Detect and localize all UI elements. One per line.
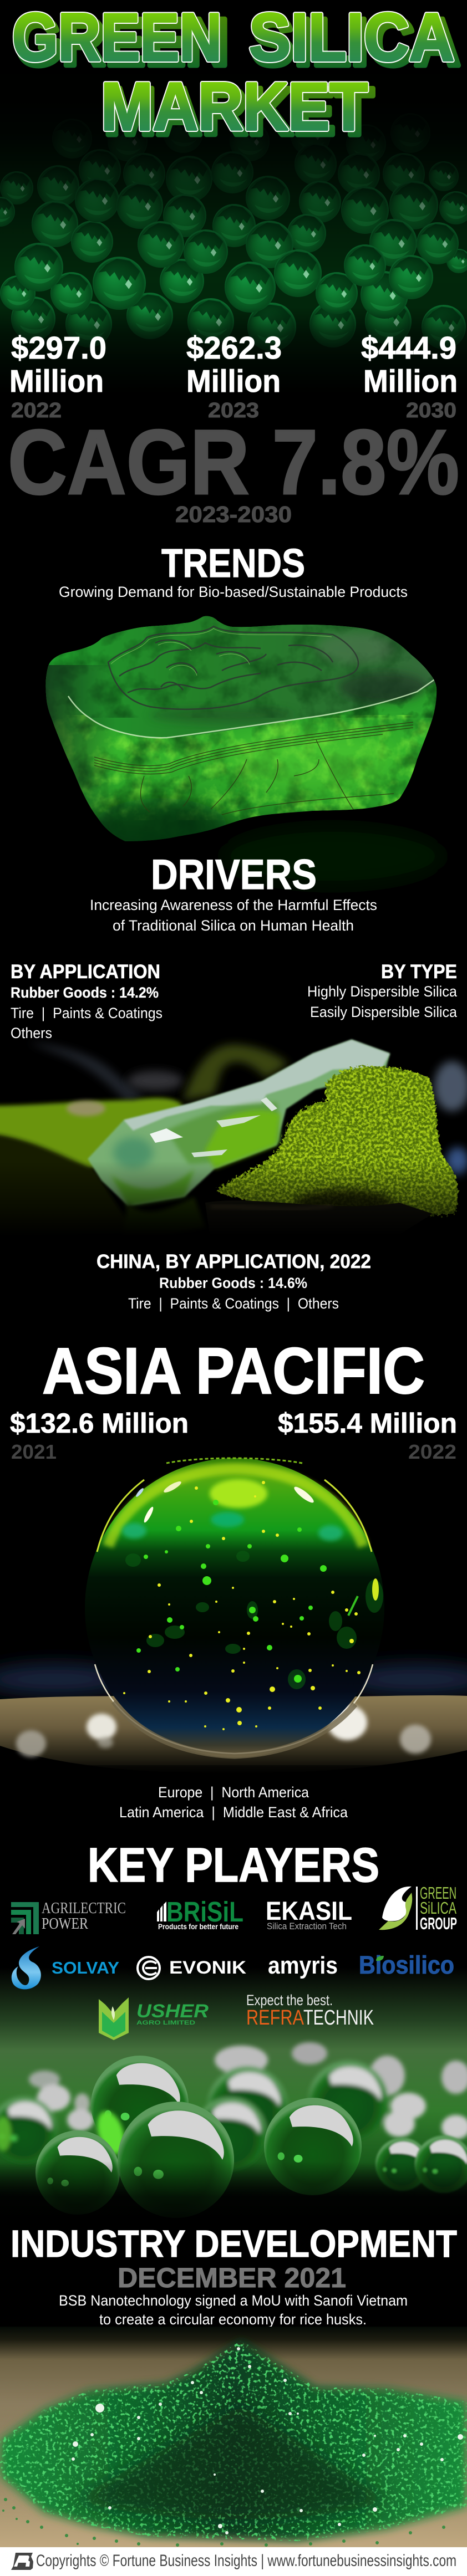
jade top edge highlight xyxy=(68,679,435,738)
left moss bank xyxy=(0,1098,183,1169)
by type block: Highly Dispersible Silica xyxy=(307,983,458,1000)
image: green glitter mound xyxy=(0,2327,467,2547)
jade top face xyxy=(44,610,444,738)
key players heading: KEY PLAYERS xyxy=(88,1838,379,1892)
title shadow layer: MARKET xyxy=(104,74,374,149)
development text: BSB Nanotechnology signed a MoU with Sanofi Vietnam xyxy=(59,2292,408,2309)
logo: Usher Agro xyxy=(99,1997,209,2040)
footer bar xyxy=(0,2547,467,2576)
right moss mound xyxy=(216,1066,458,1218)
logo: Evonik: EVONIK xyxy=(169,1957,246,1977)
sphere body xyxy=(85,1458,384,1757)
blurred distant marbles xyxy=(0,2042,467,2170)
image: glass sphere with green specks xyxy=(0,1458,467,1776)
logo: Refratechnik: TECHNIK xyxy=(303,2006,374,2030)
china by application block: Rubber Goods : 14.6% xyxy=(159,1275,307,1291)
title xyxy=(12,0,460,149)
drivers text xyxy=(90,897,377,934)
by type block xyxy=(307,961,458,1020)
figure 2023 xyxy=(186,330,282,422)
figure 2030 xyxy=(361,330,458,422)
sphere lime arcs xyxy=(97,1458,372,1552)
development text: to create a circular economy for rice husks. xyxy=(99,2311,367,2328)
logo: Solvay xyxy=(12,1946,119,1989)
title white outline layer: GREEN xyxy=(12,0,222,75)
dark rock base xyxy=(205,1200,433,1241)
logo: Agrilectric Power: POWER xyxy=(42,1915,88,1933)
logo: Refratechnik: Expect the best. xyxy=(246,1992,333,2008)
figure 2030: Million xyxy=(363,364,458,399)
icon: Fortune Business Insights logo xyxy=(11,2553,33,2570)
logo: Brisil: BRiSiL xyxy=(166,1896,243,1928)
blue haze behind sphere xyxy=(0,1664,128,1695)
sphere rim crescent xyxy=(95,1664,373,1756)
development date: DECEMBER 2021 xyxy=(118,2262,346,2293)
logo: Biosilico: Biosilico xyxy=(359,1951,454,1979)
jade engraved floral pattern xyxy=(108,626,358,709)
figure 2022: Million xyxy=(9,364,104,399)
title gradient fill layer: SILICA xyxy=(249,0,454,75)
by application block: BY APPLICATION xyxy=(11,961,160,983)
title white outline layer xyxy=(12,0,454,144)
drivers text: Increasing Awareness of the Harmful Effects xyxy=(90,897,377,913)
CAGR period: 2023-2030 xyxy=(175,502,292,527)
image: dark green glass marbles backdrop xyxy=(0,1967,467,2228)
trends text: Growing Demand for Bio-based/Sustainable Products xyxy=(59,584,408,600)
title gradient fill layer: MARKET xyxy=(101,69,368,144)
asia pacific heading: ASIA PACIFIC xyxy=(42,1335,425,1408)
logo: Brisil xyxy=(157,1896,243,1931)
logo: Evonik xyxy=(138,1957,246,1979)
figure 2022: $297.0 xyxy=(11,330,106,366)
title gradient fill layer xyxy=(12,0,454,144)
logo: Agrilectric Power xyxy=(11,1900,126,1934)
logo: Agrilectric Power: AGRILECTRIC xyxy=(42,1900,126,1917)
figure 2023: Million xyxy=(186,364,281,399)
asia pacific figures: $155.4 Million xyxy=(278,1408,457,1439)
by application block: Others xyxy=(11,1025,52,1041)
title shadow layer: SILICA xyxy=(252,4,460,80)
title shadow layer: GREEN xyxy=(15,4,229,80)
china by application block: Tire | Paints & Coatings | Others xyxy=(128,1295,339,1312)
drivers text: of Traditional Silica on Human Health xyxy=(113,917,354,934)
logo: Refratechnik xyxy=(246,1992,374,2030)
asia pacific figures: $132.6 Million xyxy=(10,1408,189,1439)
jade incised bands xyxy=(94,722,413,815)
glitter pile xyxy=(0,2340,467,2547)
by type block: Easily Dispersible Silica xyxy=(310,1004,458,1020)
regions list xyxy=(119,1784,348,1821)
logo: Amyris: amyris xyxy=(268,1952,338,1979)
figure 2023: 2023 xyxy=(208,399,259,422)
by application block xyxy=(11,961,163,1041)
logo: Refratechnik: REFRA xyxy=(246,2006,304,2030)
logo: Green Silica Group xyxy=(379,1883,457,1933)
title shadow layer xyxy=(15,4,460,149)
by application block: Tire | Paints & Coatings xyxy=(11,1005,163,1021)
market size figures xyxy=(9,330,458,422)
logo: Brisil: Products for better future xyxy=(158,1923,238,1931)
panel: hero glass beads image xyxy=(0,55,467,393)
drivers heading: DRIVERS xyxy=(151,851,317,898)
asia pacific figures xyxy=(10,1408,457,1463)
development text xyxy=(59,2292,408,2328)
logo: Usher Agro: USHER xyxy=(136,2001,209,2022)
by application block: Rubber Goods : 14.2% xyxy=(11,984,159,1001)
regions list: Latin America | Middle East & Africa xyxy=(119,1804,348,1821)
figure 2022: 2022 xyxy=(11,399,62,422)
logo: Usher Agro: AGRO LIMITED xyxy=(136,2020,195,2026)
asia pacific figures: 2022 xyxy=(408,1440,456,1463)
title white outline layer: SILICA xyxy=(249,0,454,75)
logo: Ekasil: EKASIL xyxy=(266,1896,352,1925)
image: green crystal on moss xyxy=(0,1040,467,1250)
crystal xyxy=(88,1040,390,1206)
logo: Solvay: SOLVAY xyxy=(52,1958,119,1977)
figure 2030: $444.9 xyxy=(361,330,456,366)
figure 2030: 2030 xyxy=(406,399,456,422)
figure 2022 xyxy=(9,330,106,422)
image: carved green jade block xyxy=(44,610,444,887)
sphere floating specks xyxy=(123,1481,383,1730)
title gradient fill layer: GREEN xyxy=(12,0,222,75)
blurred background shapes xyxy=(28,1042,467,1175)
regions list: Europe | North America xyxy=(158,1784,309,1801)
china by application block xyxy=(97,1251,371,1312)
trends heading: TRENDS xyxy=(161,541,305,586)
by type block: BY TYPE xyxy=(381,961,457,983)
asia pacific figures: 2021 xyxy=(11,1440,57,1463)
figure 2023: $262.3 xyxy=(186,330,282,366)
china by application block: CHINA, BY APPLICATION, 2022 xyxy=(97,1251,371,1272)
title white outline layer: MARKET xyxy=(101,69,368,144)
table surface with bokeh xyxy=(0,1695,467,1773)
logo: Ekasil: Silica Extraction Tech xyxy=(267,1921,347,1931)
